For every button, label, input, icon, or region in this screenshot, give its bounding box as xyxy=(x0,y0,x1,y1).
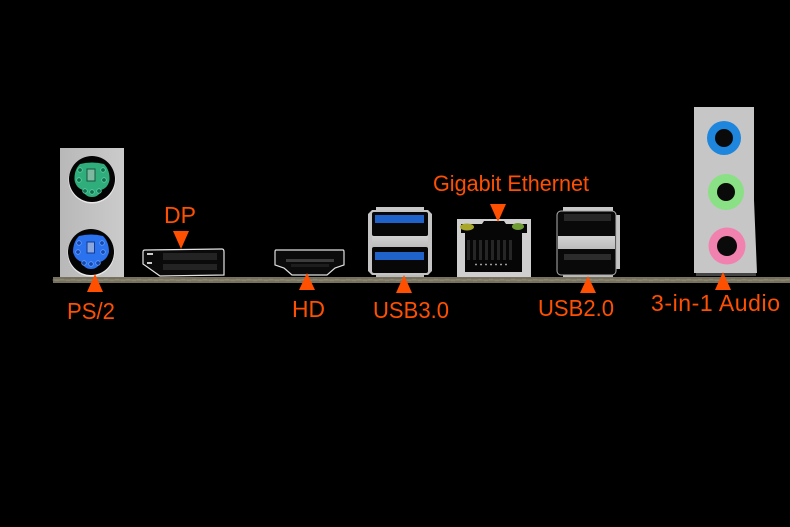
label: HD: HD xyxy=(292,296,325,322)
arrow: USB3.0 xyxy=(396,275,412,293)
label: USB3.0: USB3.0 xyxy=(373,297,449,323)
USB 3.0 stacked connector xyxy=(368,207,432,277)
blue PS/2 port xyxy=(68,229,114,276)
arrow: 3-in-1 Audio xyxy=(715,272,731,290)
label: PS/2: PS/2 xyxy=(67,298,115,324)
USB 3.0 blue tongues xyxy=(375,215,424,260)
USB 2.0 stacked connector xyxy=(557,207,620,277)
HDMI connector xyxy=(275,250,344,275)
arrow: DP xyxy=(173,231,189,249)
arrow: USB2.0 xyxy=(580,276,596,293)
label: 3-in-1 Audio: 3-in-1 Audio xyxy=(651,290,780,316)
label: DP: DP xyxy=(164,202,196,228)
blue audio jack xyxy=(707,121,741,155)
pink audio jack xyxy=(708,228,746,264)
label: USB2.0: USB2.0 xyxy=(538,295,614,321)
RJ45 Ethernet connector xyxy=(457,219,531,277)
DisplayPort connector xyxy=(143,249,224,276)
arrow: HD xyxy=(299,273,315,290)
arrow: Gigabit Ethernet xyxy=(490,204,506,222)
audio jack plate xyxy=(694,107,757,276)
green PS/2 port xyxy=(68,156,116,204)
green audio jack xyxy=(708,174,744,210)
arrow: PS/2 xyxy=(87,274,103,292)
label: Gigabit Ethernet: Gigabit Ethernet xyxy=(433,171,589,196)
circuit board edge xyxy=(53,277,790,283)
link LEDs xyxy=(460,223,524,230)
PS/2 port block xyxy=(60,148,124,277)
